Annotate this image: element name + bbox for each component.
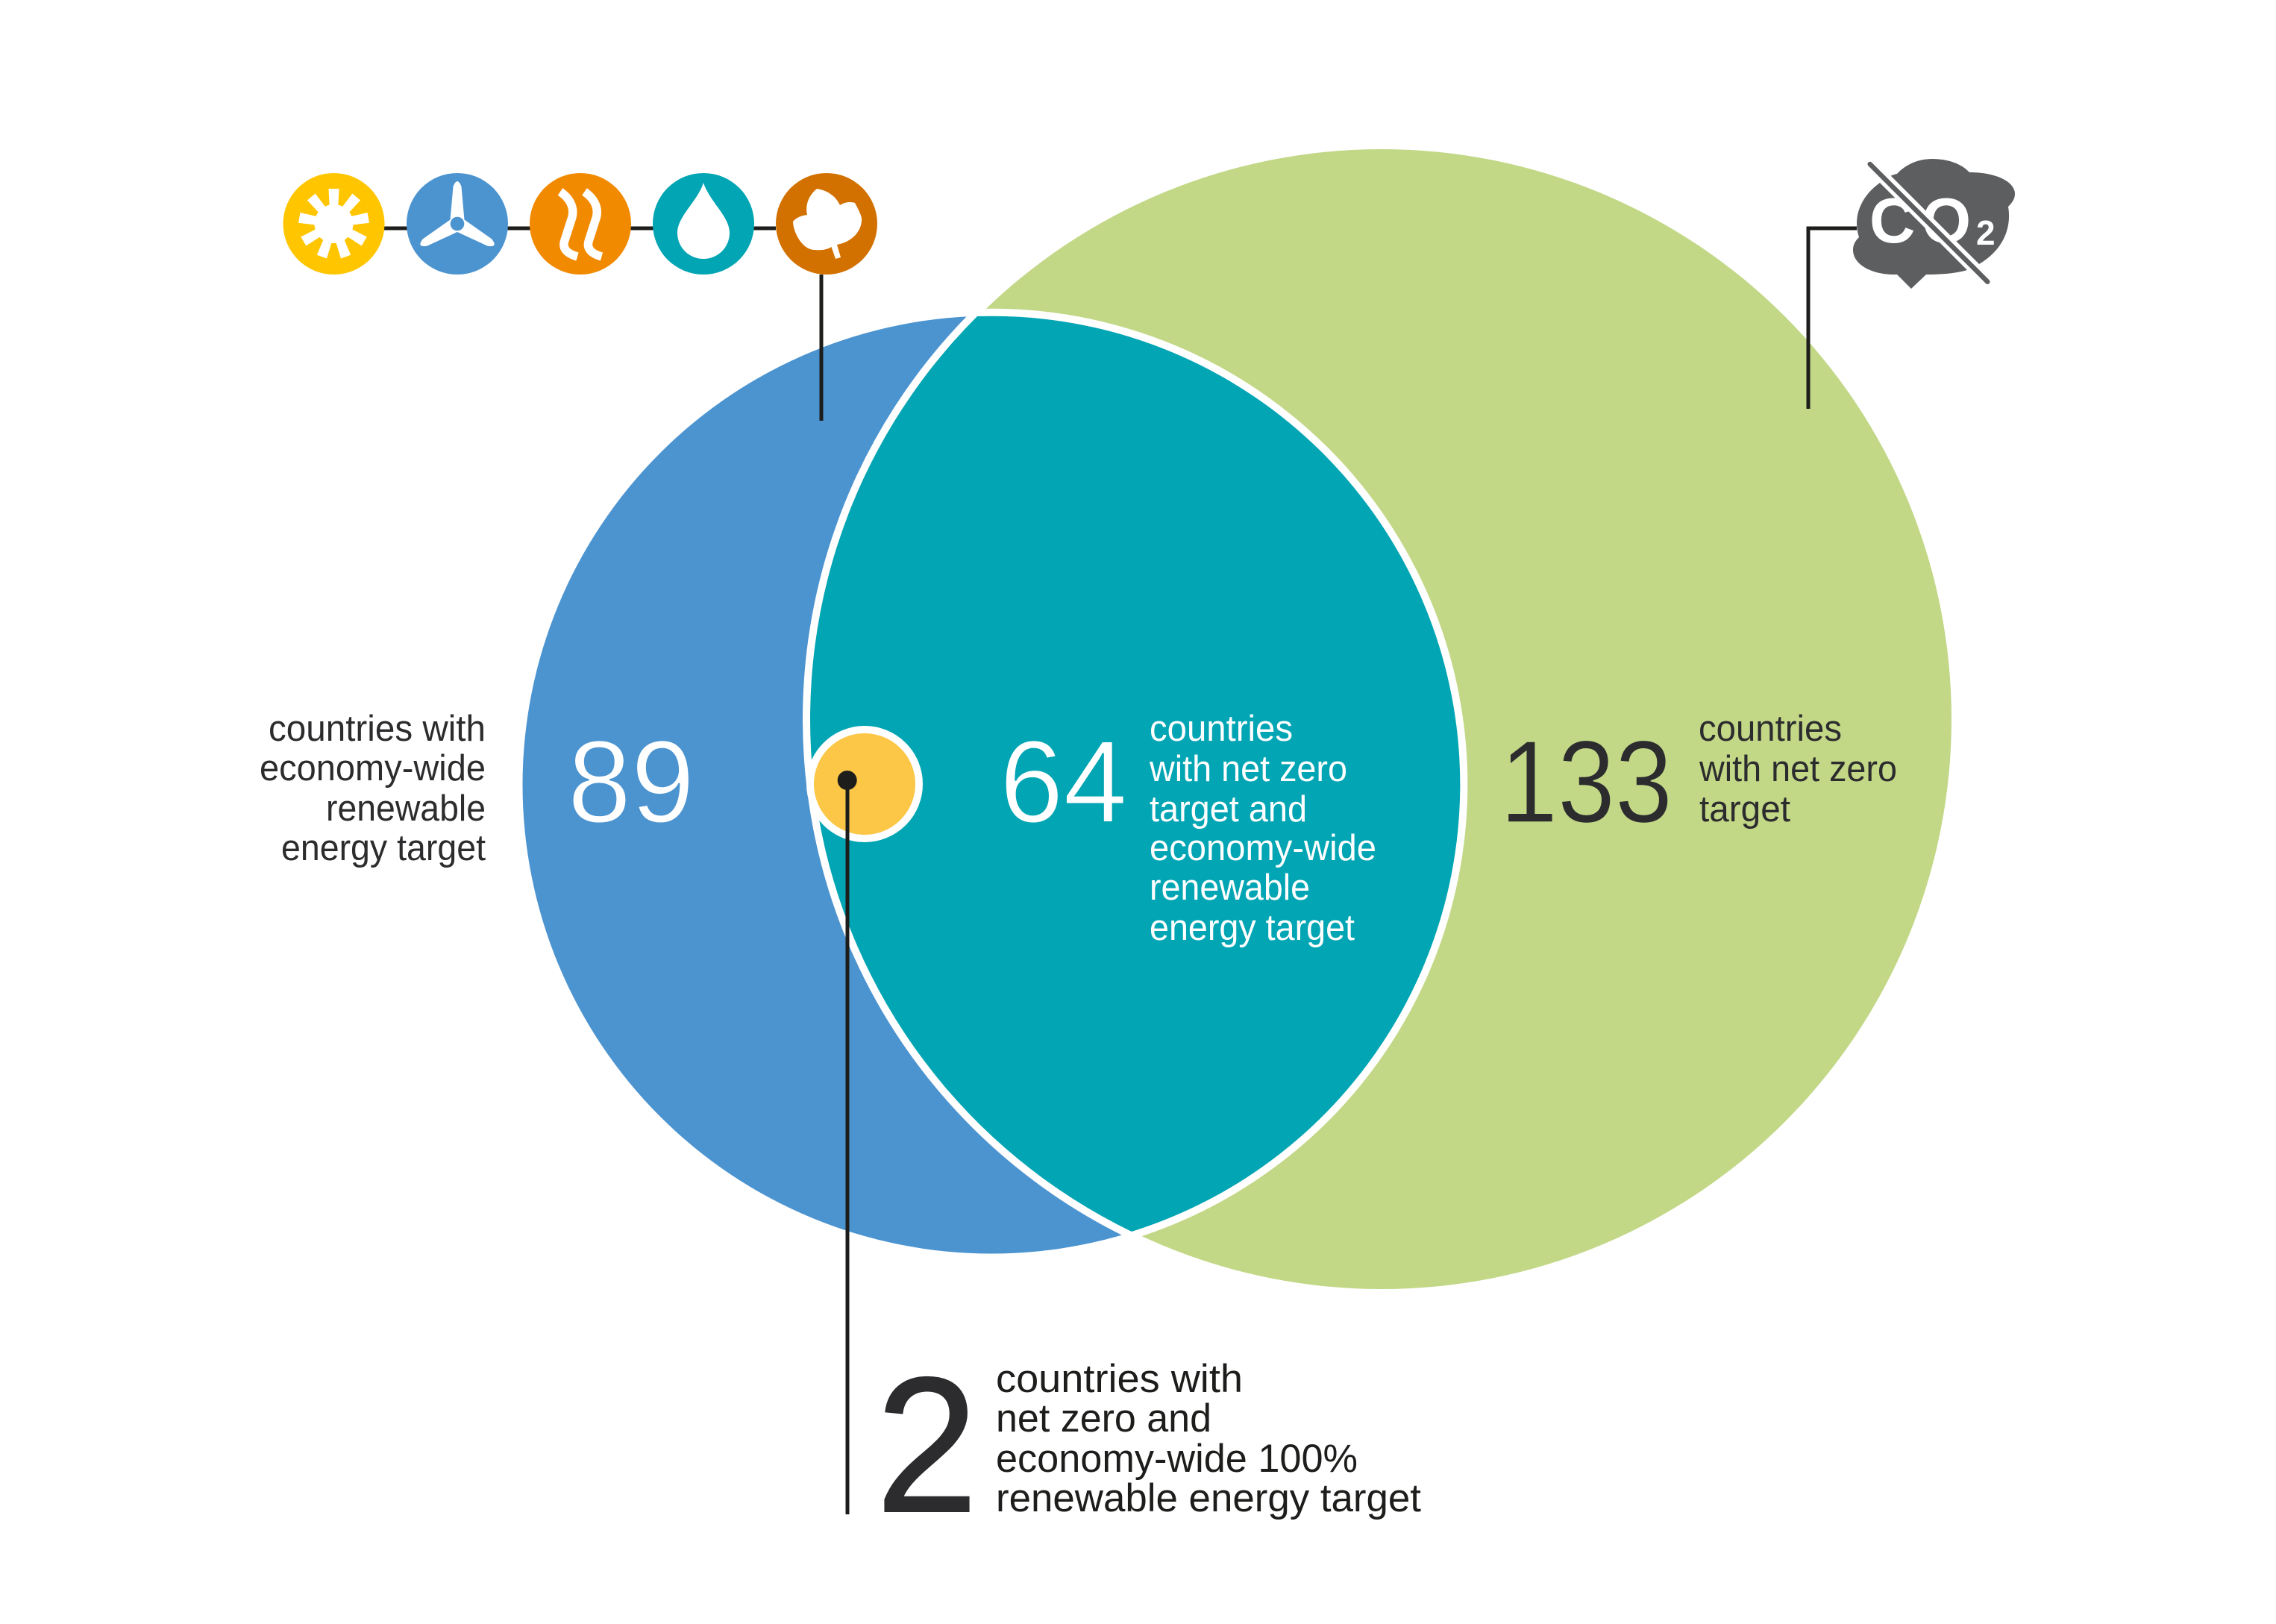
label: 89 countries — [260, 709, 695, 868]
circle: economy-wide renewable energy target — [522, 316, 1461, 1253]
text: economy-wide renewable energy target: countries with — [269, 709, 486, 749]
icon: solar — [283, 173, 385, 275]
callout: 2 countries — [876, 1337, 1421, 1552]
label: 64 countries — [1000, 709, 1376, 948]
text: economy-wide renewable energy target: renewable — [326, 789, 486, 829]
text: net zero and renewable energy target — [1149, 709, 1376, 948]
text: net zero target — [1699, 709, 1897, 830]
icon: bioenergy leaf — [776, 173, 877, 275]
text: net zero target: with net zero — [1699, 749, 1897, 789]
number 89: 89 — [568, 717, 695, 847]
icon: crossed-out CO2 cloud — [1853, 159, 2015, 289]
text: net zero and 100% renewable target: economy-wide 100% — [996, 1437, 1358, 1481]
circle: 100% renewable and net zero — [810, 730, 919, 838]
leader line: net zero icon — [1808, 228, 1857, 409]
overlap: both targets — [810, 316, 1460, 1232]
text: economy-wide renewable energy target: economy-wide — [260, 748, 486, 789]
circle: net zero target — [812, 149, 1951, 1289]
leader line: renewable icons connector — [384, 228, 821, 421]
text: net zero and renewable energy target: energy target — [1150, 908, 1355, 948]
text: net zero and 100% renewable target — [996, 1357, 1421, 1520]
text: net zero and 100% renewable target: countries with — [996, 1357, 1243, 1401]
text: net zero and 100% renewable target: net zero and — [996, 1396, 1211, 1440]
text: net zero and renewable energy target: economy-wide — [1150, 828, 1376, 868]
leader line: yellow circle to callout — [838, 771, 857, 1514]
text: net zero target: target — [1699, 789, 1790, 830]
text: economy-wide renewable energy target: energy target — [281, 828, 486, 868]
icon: geothermal heat — [530, 173, 631, 275]
label: 133 countries — [1500, 709, 1897, 847]
number 2: 2 — [876, 1337, 978, 1552]
CO2 label: C — [1869, 186, 1915, 257]
renewable energy icons — [283, 173, 877, 275]
text: net zero target: countries — [1699, 709, 1842, 749]
text: net zero and renewable energy target: with net zero — [1149, 749, 1347, 789]
icon: crossed-out CO2 cloud: 2 — [1976, 213, 1996, 252]
text: net zero and renewable energy target: target and — [1150, 789, 1307, 830]
number 133: 133 — [1500, 717, 1672, 847]
CO2 label: O — [1922, 186, 1971, 257]
text: net zero and renewable energy target: renewable — [1150, 868, 1310, 908]
number 64: 64 — [1000, 717, 1127, 847]
icon: hydro water drop — [653, 173, 754, 275]
text: economy-wide renewable energy target — [260, 709, 486, 868]
venn diagram — [522, 149, 1951, 1289]
text: net zero and 100% renewable target: renewable energy target — [996, 1476, 1421, 1520]
icon: wind — [407, 173, 508, 275]
text: net zero and renewable energy target: countries — [1150, 709, 1293, 749]
